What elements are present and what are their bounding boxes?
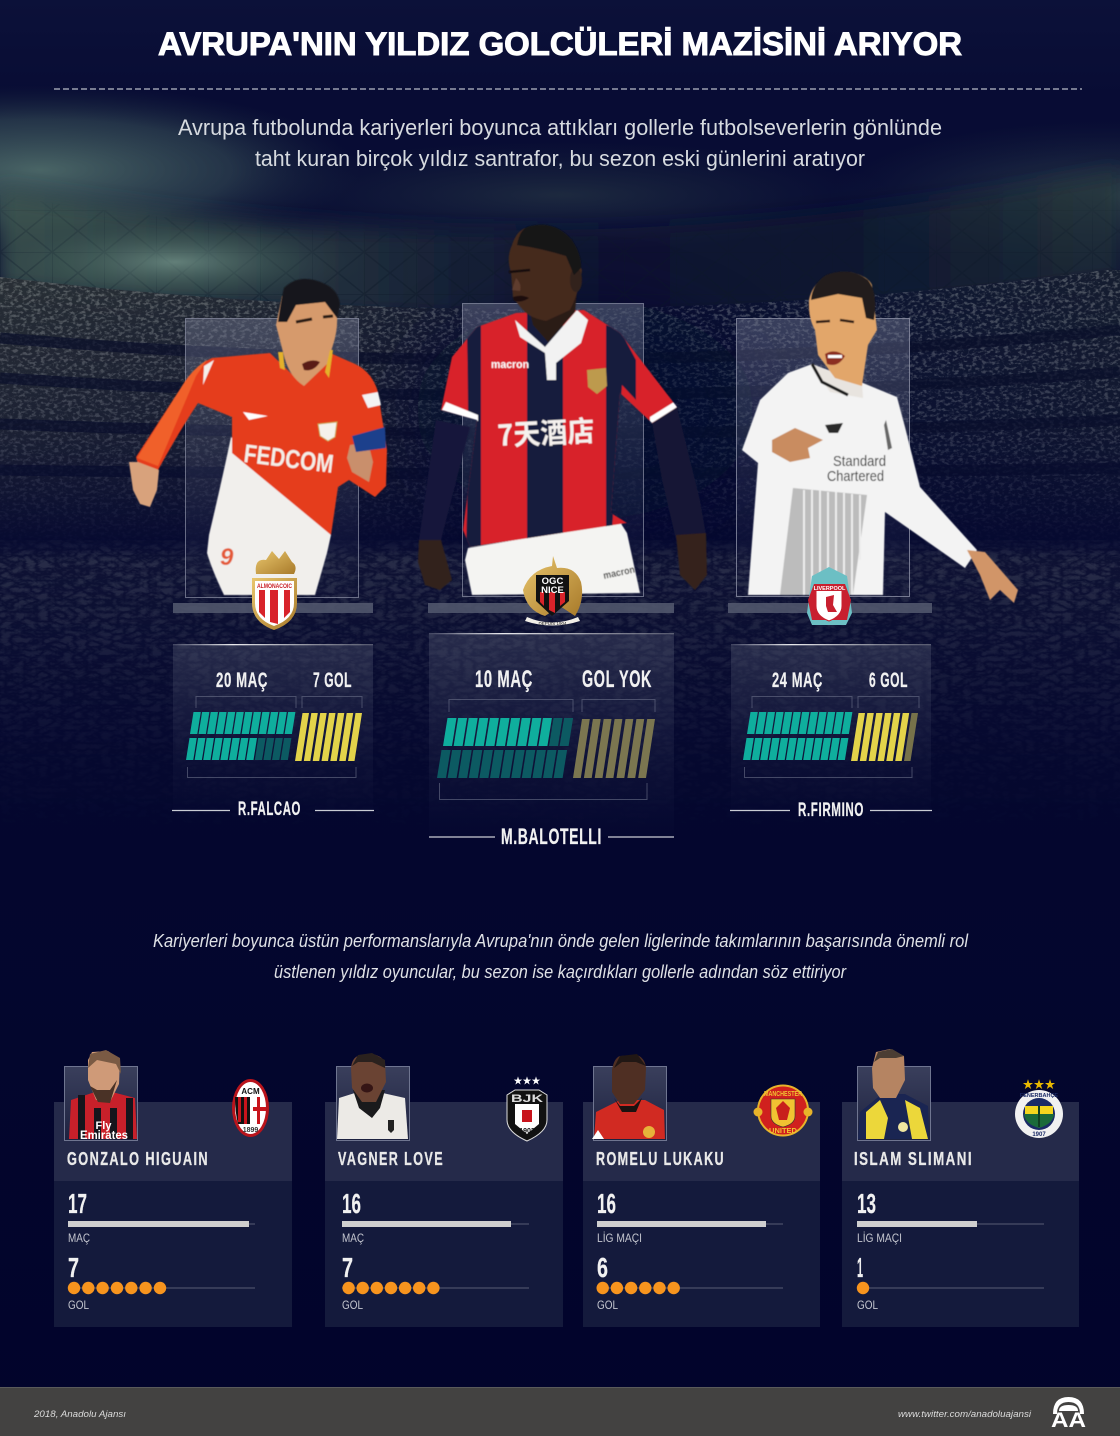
intro text: Avrupa futbolunda kariyerleri boyunca attıkları gollerle futbolseverlerin gönlünde (178, 115, 942, 140)
logo: Anadolu Ajansı: AA (1051, 1409, 1086, 1432)
matches label: 24 MAÇ (772, 669, 823, 692)
goals stat: 6 (597, 1252, 608, 1283)
goal bars (851, 713, 918, 761)
crest: Fenerbahçe: FENERBAHÇE (1020, 1093, 1058, 1099)
intro text: taht kuran birçok yıldız santrafor, bu sezon eski günlerini aratıyor (255, 146, 865, 171)
matches stat: LİG MAÇI (597, 1231, 642, 1245)
crest: OGC Nice (523, 556, 582, 626)
name: GONZALO HIGUAIN (67, 1149, 209, 1169)
name: ISLAM SLIMANI (854, 1149, 973, 1169)
player name: M.BALOTELLI (501, 824, 602, 849)
player: M.Balotelli illustration: macron (491, 359, 529, 371)
portrait: Higuain: Emirates (80, 1128, 128, 1142)
card: Gonzalo Higuain (54, 1050, 292, 1327)
goals label: 7 GOL (313, 669, 352, 692)
secondary intro text: Kariyerleri boyunca üstün performanslarıyla Avrupa'nın önde gelen liglerinde takımlarının başarısında önemli rol (153, 930, 969, 951)
crest: OGC Nice: OGC (542, 576, 563, 587)
player frames (173, 304, 932, 613)
matches stat: 16 (597, 1188, 616, 1219)
secondary intro text: üstlenen yıldız oyuncular, bu sezon ise kaçırdıkları gollerle adından söz ettiriyor (274, 961, 847, 982)
matches stat (857, 1188, 1044, 1245)
goals stat: GOL (342, 1298, 363, 1312)
crest: AS Monaco: ALMONACOIC (257, 583, 292, 590)
card: Vagner Love (325, 1053, 563, 1327)
goals stat (596, 1252, 783, 1312)
player name: R.FALCAO (238, 799, 301, 820)
matches stat: 17 (68, 1188, 87, 1219)
footer (0, 1387, 1120, 1436)
goals stat: 7 (342, 1252, 353, 1283)
matches stat: LİG MAÇI (857, 1231, 902, 1245)
player: M.Balotelli illustration (418, 225, 707, 595)
crest: AC Milan: 1899 (243, 1127, 258, 1134)
matches label: 20 MAÇ (216, 669, 268, 692)
match bars (186, 712, 295, 760)
player: R.Firmino illustration: Standard (833, 453, 886, 470)
crest: Manchester United (754, 1086, 812, 1136)
matches stat: 13 (857, 1188, 876, 1219)
portrait: Lukaku (592, 1054, 666, 1140)
player: R.Falcao illustration: 9 (220, 544, 234, 571)
player: R.Firmino illustration: Chartered (827, 468, 884, 485)
crest: Manchester United: MANCHESTER (764, 1089, 802, 1098)
goal bars (295, 713, 362, 761)
copyright: 2018, Anadolu Ajansı (33, 1409, 126, 1420)
stat panel: M.Balotelli (429, 633, 674, 849)
crest: Beşiktaş: 1903 (519, 1128, 535, 1135)
crest: Fenerbahçe (1015, 1079, 1063, 1138)
crest: Beşiktaş (507, 1076, 547, 1141)
goals stat: GOL (857, 1298, 878, 1312)
goals stat: GOL (597, 1298, 618, 1312)
goals stat (68, 1252, 255, 1312)
portrait: Love (336, 1053, 410, 1140)
player: R.Falcao illustration (129, 279, 387, 595)
crest: AS Monaco (252, 551, 297, 630)
card: Romelu Lukaku (583, 1054, 820, 1327)
background: stadium at night (0, 0, 1120, 762)
matches label: 10 MAÇ (475, 666, 533, 693)
crest: Beşiktaş: ★★★ (513, 1076, 541, 1086)
matches stat: MAÇ (68, 1231, 90, 1245)
crest: Fenerbahçe: ★★★ (1022, 1079, 1056, 1091)
crest: AC Milan: ACM (241, 1087, 260, 1096)
goals label: GOL YOK (582, 666, 652, 693)
dashed divider (54, 88, 1082, 90)
portrait: Higuain: Fly (96, 1120, 112, 1132)
title: AVRUPA'NIN YILDIZ GOLCÜLERİ MAZİSİNİ ARIYOR (158, 26, 962, 62)
player: M.Balotelli illustration: 7天酒店 (496, 408, 595, 455)
matches stat: 16 (342, 1188, 361, 1219)
stat panel: R.Falcao (172, 644, 374, 820)
goals label: 6 GOL (869, 669, 908, 692)
player: R.Falcao illustration: FEDCOM (242, 438, 335, 479)
matches stat: MAÇ (342, 1231, 364, 1245)
portrait: Higuain (64, 1050, 138, 1142)
matches stat (342, 1188, 529, 1245)
crest: OGC Nice: NICE (541, 585, 564, 596)
name: ROMELU LUKAKU (596, 1149, 725, 1169)
goal bars (573, 719, 655, 778)
crest: Manchester United: UNITED (769, 1126, 798, 1135)
player name: R.FIRMINO (798, 800, 864, 821)
stat panel: R.Firmino (730, 644, 932, 821)
crest: Beşiktaş: BJK (511, 1093, 543, 1105)
goals stat (857, 1252, 1044, 1312)
twitter address: www.twitter.com/anadoluajansi (898, 1409, 1032, 1420)
player: M.Balotelli illustration: macron (602, 565, 636, 582)
goals stat: 1 (857, 1252, 863, 1283)
goals stat (342, 1252, 529, 1312)
goals stat: GOL (68, 1298, 89, 1312)
match bars (437, 718, 573, 778)
logo: Anadolu Ajansı (1051, 1397, 1086, 1432)
card: Islam Slimani (842, 1049, 1079, 1327)
match bars (743, 712, 852, 760)
matches stat (68, 1188, 255, 1245)
matches stat (597, 1188, 783, 1245)
goals stat: 7 (68, 1252, 79, 1283)
crest: OGC Nice: DEPUIS 1904 (538, 621, 567, 626)
name: VAGNER LOVE (338, 1149, 444, 1169)
crest: Liverpool FC (807, 567, 852, 625)
crest: AC Milan (232, 1079, 269, 1137)
crest: Fenerbahçe: 1907 (1032, 1132, 1046, 1138)
crest: Liverpool FC: LIVERPOOL (814, 586, 846, 592)
portrait: Slimani (858, 1049, 930, 1140)
player: R.Firmino illustration (742, 271, 1018, 603)
